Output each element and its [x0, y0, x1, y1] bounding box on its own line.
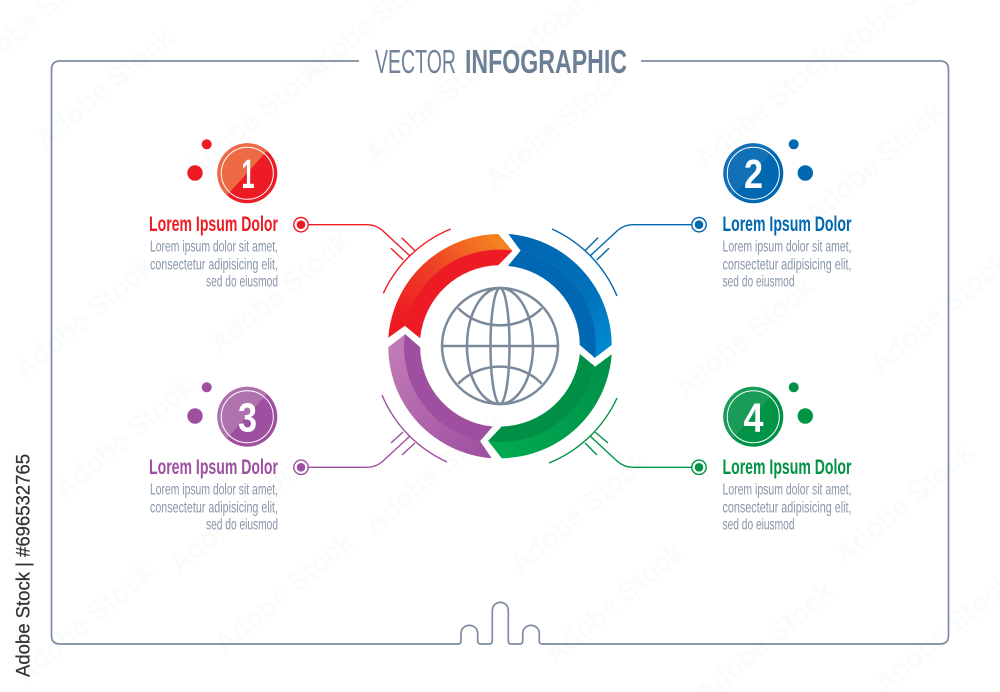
description: blue: consectetur adipisicing elit,	[722, 256, 852, 273]
description: purple: Lorem ipsum dolor sit amet,	[150, 482, 278, 499]
description: green	[722, 482, 852, 534]
connector: red	[308, 225, 451, 293]
description: blue	[722, 239, 852, 291]
watermark layer: Adobe Stock	[8, 556, 160, 690]
description: red: Lorem ipsum dolor sit amet,	[150, 239, 278, 256]
badge: number 3	[217, 386, 278, 447]
item 2: blue	[552, 130, 852, 296]
watermark layer: Adobe Stock	[798, 96, 950, 230]
watermark layer: Adobe Stock	[503, 446, 655, 580]
badge: number 1	[217, 143, 278, 204]
arrow segment: green	[488, 354, 612, 458]
title: VECTOR	[375, 43, 456, 80]
item 4: green	[549, 373, 852, 534]
node: blue	[692, 218, 706, 232]
item 3: purple	[149, 373, 447, 534]
watermark layer: Adobe Stock	[8, 251, 160, 385]
connector: purple	[308, 395, 447, 467]
heading: green: Lorem Ipsum Dolor	[722, 456, 852, 479]
description: red: consectetur adipisicing elit,	[150, 256, 278, 273]
description: purple: sed do eiusmod	[206, 517, 278, 534]
watermark layer: Adobe Stock	[203, 226, 355, 360]
description: green: consectetur adipisicing elit,	[722, 499, 852, 516]
item 1: red	[149, 130, 451, 293]
badge: number 4	[723, 386, 784, 447]
watermark layer: Adobe Stock	[538, 536, 690, 670]
circular arrow diagram	[388, 234, 612, 458]
decorative dots: green	[789, 382, 813, 424]
title	[375, 43, 627, 80]
node: purple	[294, 460, 308, 474]
description: purple: consectetur adipisicing elit,	[150, 499, 278, 516]
frame border with skyline bumps	[52, 61, 948, 644]
watermark layer: Adobe Stock	[828, 436, 980, 570]
title: INFOGRAPHIC	[465, 43, 627, 80]
watermark layer: Adobe Stock	[358, 36, 510, 170]
badge: number 2	[723, 143, 784, 204]
decorative dots: blue	[789, 139, 813, 181]
watermark layer: Adobe Stock	[688, 41, 840, 175]
watermark layer: Adobe Stock	[163, 446, 315, 580]
decorative dots: purple	[187, 382, 212, 424]
arrow segment: blue	[508, 234, 612, 358]
connector: green	[549, 398, 692, 467]
description: green: Lorem ipsum dolor sit amet,	[722, 482, 852, 499]
heading: purple: Lorem Ipsum Dolor	[149, 456, 278, 479]
icon: globe	[442, 288, 558, 404]
badge: number 3: 3	[238, 394, 257, 440]
description: green: sed do eiusmod	[722, 517, 794, 534]
stock id label: Adobe Stock | #696532765	[12, 454, 34, 677]
arrow segment: red	[388, 234, 512, 338]
watermark layer: Adobe Stock	[668, 271, 820, 405]
badge: number 1: 1	[242, 151, 254, 197]
decorative dots: red	[187, 139, 212, 181]
description: blue: Lorem ipsum dolor sit amet,	[722, 239, 852, 256]
heading: red: Lorem Ipsum Dolor	[149, 213, 278, 236]
badge: number 2: 2	[744, 151, 763, 197]
node: red	[294, 218, 308, 232]
description: red	[150, 239, 278, 291]
arrow segment: purple	[388, 334, 492, 458]
watermark layer: Adobe Stock	[358, 406, 510, 540]
watermark layer: Adobe Stock	[28, 21, 180, 155]
description: blue: sed do eiusmod	[722, 274, 794, 291]
watermark layer: Adobe Stock	[48, 371, 200, 505]
watermark layer: Adobe Stock	[178, 51, 330, 185]
connector: blue	[552, 225, 692, 296]
watermark layer: Adobe Stock	[208, 526, 360, 660]
description: purple	[150, 482, 278, 534]
node: green	[692, 460, 706, 474]
watermark layer: Adobe Stock	[478, 61, 630, 195]
badge: number 4: 4	[744, 394, 764, 440]
heading: blue: Lorem Ipsum Dolor	[722, 213, 852, 236]
description: red: sed do eiusmod	[206, 274, 278, 291]
